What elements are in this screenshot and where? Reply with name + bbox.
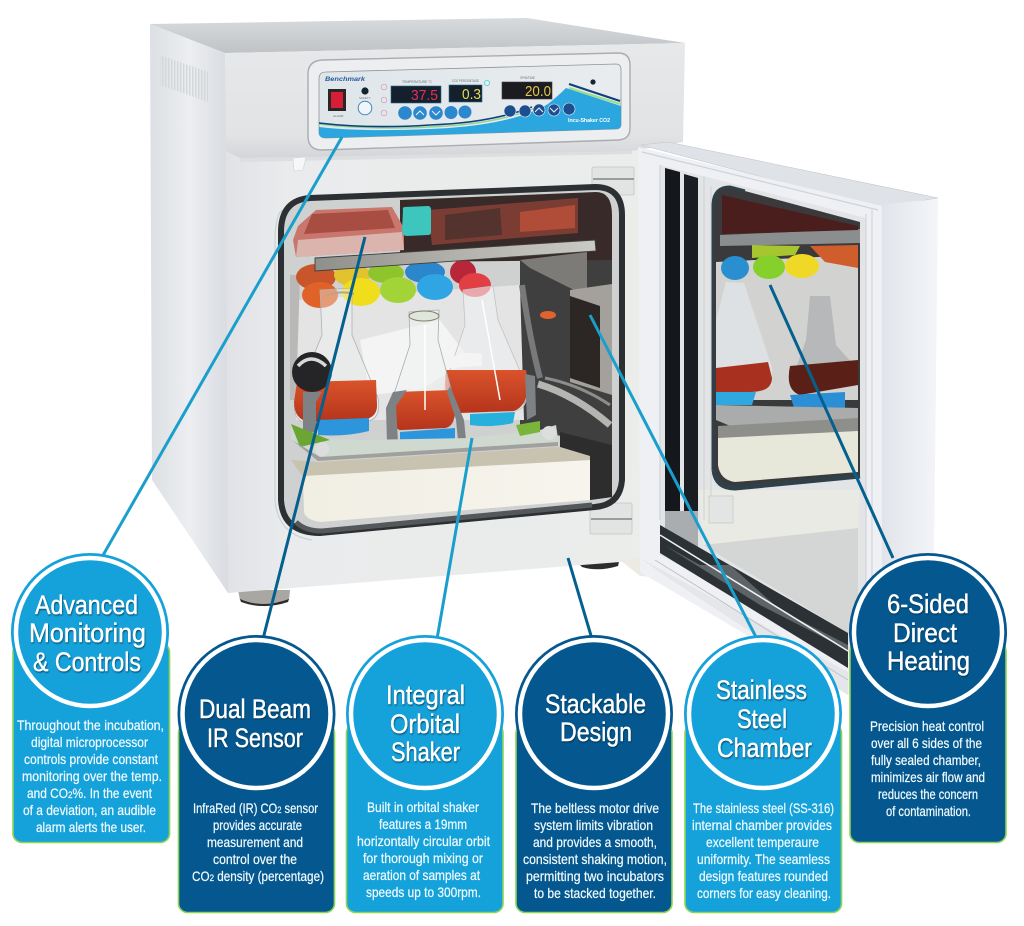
chamber interior: [283, 189, 620, 532]
control head: [225, 43, 685, 158]
card title: Monitoring: [29, 618, 146, 648]
door: [638, 142, 938, 695]
card title: Stackable: [545, 689, 646, 719]
window gasket: [713, 187, 745, 470]
card text: and CO2%. In the event: [27, 785, 152, 801]
foot: right: [575, 558, 620, 569]
dark lower strip: [660, 525, 848, 668]
card text: to be stacked together.: [534, 885, 656, 901]
card text: Throughout the incubation,: [17, 717, 164, 733]
right interior shadow: [520, 232, 612, 500]
leader line: orbital shaker: [437, 438, 472, 639]
bottom hinge: [590, 503, 632, 534]
card body: [13, 643, 170, 842]
card title: Steel: [737, 704, 787, 734]
lower right interior: [560, 432, 612, 500]
glass strips: [665, 168, 698, 560]
badge circle: [684, 635, 842, 793]
card text: Precision heat control: [870, 718, 984, 734]
cabinet top: [150, 18, 685, 53]
indicator lamps: [381, 84, 387, 116]
card: Integral Orbital Shaker: [346, 635, 504, 912]
card title: & Controls: [33, 647, 141, 677]
card text: permitting two incubators: [526, 868, 664, 884]
shaker tray: [291, 421, 559, 462]
card text: InfraRed (IR) CO2 sensor: [193, 800, 318, 816]
card text: provides accurate: [213, 817, 302, 833]
logo: Benchmark: [325, 76, 366, 83]
card text: horizontally circular orbit: [357, 833, 490, 849]
card text: monitoring over the temp.: [22, 768, 162, 784]
badge circle: [515, 635, 673, 793]
speed display: SPIN/TIME: [520, 76, 535, 80]
card text: minimizes air flow and: [871, 769, 985, 785]
leader line: heating: [770, 285, 893, 558]
cabinet front: [226, 142, 640, 593]
card title: Heating: [887, 646, 970, 676]
card title: Dual Beam: [199, 694, 311, 724]
card body: [178, 724, 334, 912]
card body: [685, 724, 842, 912]
reflected upper contents: [722, 195, 858, 234]
badge ring: [182, 640, 330, 788]
card text: alarm alerts the user.: [36, 819, 146, 835]
temperature display: 37.5: [411, 87, 438, 104]
card title: [887, 589, 970, 676]
card text: for thorough mixing or: [363, 850, 483, 866]
latch: [293, 157, 306, 171]
card title: [199, 694, 311, 753]
glass floor: [660, 165, 866, 660]
frame top stripe: [642, 152, 878, 210]
badge ring: [854, 558, 1002, 706]
card text: [357, 799, 490, 900]
card text: CO2 density (percentage): [192, 868, 324, 884]
left flask: [294, 288, 379, 424]
card title: [545, 689, 646, 747]
flask bases: [318, 412, 515, 445]
shaker buttons: [504, 103, 575, 117]
card title: Shaker: [391, 737, 460, 767]
platform front: [303, 460, 590, 522]
card body: [850, 642, 1006, 842]
door top edge: [641, 142, 938, 208]
back caps: [296, 260, 476, 290]
CO2 display: [449, 79, 482, 103]
badge circle: [849, 553, 1007, 711]
card text: of a deviation, an audible: [23, 802, 156, 818]
gasket: [281, 187, 622, 533]
leader line: IR sensor: [263, 237, 365, 639]
card text: The stainless steel (SS-316): [693, 800, 834, 816]
badge ring: [351, 640, 499, 788]
leader line: stackable: [568, 558, 592, 639]
chevrons: [416, 108, 558, 115]
door bottom rail: [640, 558, 848, 695]
card: Dual Beam IR Sensor: [178, 635, 336, 912]
reflected flask right: [789, 296, 858, 395]
card title: Direct: [893, 618, 958, 648]
card: Stackable Design: [515, 635, 673, 912]
card text: speeds up to 300rpm.: [366, 884, 481, 900]
card title: Design: [560, 717, 632, 747]
badge ring: [16, 558, 164, 706]
card title: Chamber: [717, 733, 812, 763]
panel face: [319, 64, 621, 138]
control panel: [308, 53, 630, 150]
temperature display: TEMPERATURE °C: [402, 80, 432, 84]
reflected bases: [716, 392, 756, 405]
reflected flask left: [716, 282, 772, 392]
speed display: [502, 76, 552, 100]
safety reset: [358, 87, 372, 115]
CO2 display: CO2 PERCENTAGE: [452, 79, 479, 83]
card body: [516, 724, 672, 912]
card text: control over the: [213, 851, 297, 867]
platform top: [291, 447, 590, 477]
window frame stripes: [660, 165, 872, 655]
card: Advanced Monitoring & Controls: [11, 553, 170, 842]
right flask: [444, 286, 528, 413]
incubator: [150, 18, 938, 695]
badge circle: [346, 635, 504, 793]
card text: reduces the concern: [878, 786, 978, 802]
foot: left: [238, 590, 290, 606]
card text: design features rounded: [699, 868, 828, 884]
top hinge: [592, 167, 634, 195]
gasket glass reflection: [275, 196, 312, 540]
reflected floor: [703, 528, 858, 640]
badge ring: [689, 640, 837, 788]
CO2 lamp: [484, 80, 490, 86]
door lower reflection: [698, 490, 860, 548]
card title: [716, 675, 812, 763]
clamps: [303, 374, 536, 443]
reflected shelf: [720, 229, 860, 246]
speed display: 20.0: [525, 83, 551, 100]
card text: controls provide constant: [24, 751, 158, 767]
side vents: [160, 55, 208, 102]
leader line: stainless chamber: [590, 315, 757, 639]
card text: features a 19mm: [379, 816, 467, 832]
front caps: [302, 273, 491, 308]
middle flask: [389, 310, 455, 430]
reflected platform: [718, 430, 858, 482]
panel bezel: [308, 53, 630, 150]
chamber window: [275, 187, 622, 540]
card text: and provides a smooth,: [533, 834, 657, 850]
horizontal flask: [428, 198, 578, 245]
top dark back: [400, 192, 612, 262]
leader line: controls: [102, 137, 342, 557]
card title: [29, 590, 146, 677]
temperature buttons: [398, 106, 472, 120]
card text: [192, 800, 324, 884]
back paper: [296, 285, 524, 420]
knob: [292, 352, 332, 392]
card text: [17, 717, 164, 835]
badge ring: [520, 640, 668, 788]
safety reset: SAFETY: [359, 96, 371, 100]
product logo: Incu-Shaker CO2: [568, 118, 610, 124]
head shadow: [240, 150, 632, 162]
card text: of contamination.: [886, 803, 971, 819]
panel swoosh: [319, 84, 621, 138]
card text: [523, 800, 667, 901]
shelf: [315, 240, 596, 271]
card text: over all 6 sides of the: [871, 735, 982, 751]
card text: [870, 718, 985, 819]
cable: [522, 285, 540, 378]
card text: fully sealed chamber,: [871, 752, 981, 768]
heater glow: [540, 311, 556, 319]
card title: Stainless: [716, 675, 807, 705]
door frame: [638, 147, 882, 695]
card text: Built in orbital shaker: [367, 799, 479, 815]
card text: digital microprocessor: [31, 734, 148, 750]
reflected hinge: [709, 496, 733, 523]
card title: Advanced: [35, 590, 138, 620]
card text: uniformity. The seamless: [697, 851, 830, 867]
card text: internal chamber provides: [692, 817, 832, 833]
door side: [878, 199, 938, 650]
badge circle: [178, 635, 336, 793]
teal cap: [402, 206, 431, 236]
card text: [692, 800, 834, 901]
card text: consistent shaking motion,: [523, 851, 667, 867]
cabinet side: [150, 24, 228, 593]
CO2 display: 0.3: [462, 86, 481, 103]
silver track: [538, 378, 610, 425]
badge circle: [11, 553, 169, 711]
door window: [713, 187, 860, 490]
power switch: ALARM: [333, 114, 344, 118]
sensor panel: [570, 284, 612, 395]
card title: Integral: [386, 680, 465, 710]
card: Stainless Steel Chamber: [684, 635, 842, 912]
card title: Orbital: [390, 709, 460, 739]
card title: [386, 680, 465, 767]
card title: IR Sensor: [207, 723, 303, 753]
tissue culture plate: [293, 207, 404, 257]
target lamp: [590, 79, 596, 85]
card text: excellent temperaure: [706, 834, 819, 850]
card text: aeration of samples at: [363, 867, 480, 883]
rear hardware: [520, 252, 587, 290]
card: 6-Sided Direct Heating: [849, 553, 1007, 842]
card text: The beltless motor drive: [531, 800, 659, 816]
reflected tray: [716, 405, 858, 428]
card text: system limits vibration: [534, 817, 653, 833]
reflected gasket: [714, 470, 860, 488]
base strip under door: [620, 558, 668, 578]
card body: [346, 724, 503, 912]
card title: 6-Sided: [887, 589, 969, 619]
power switch: [328, 89, 346, 118]
card text: measurement and: [207, 834, 303, 850]
temperature display: [391, 80, 441, 104]
reflected caps: [721, 245, 858, 280]
card text: corners for easy cleaning.: [697, 885, 831, 901]
reflected paper: [716, 255, 858, 400]
